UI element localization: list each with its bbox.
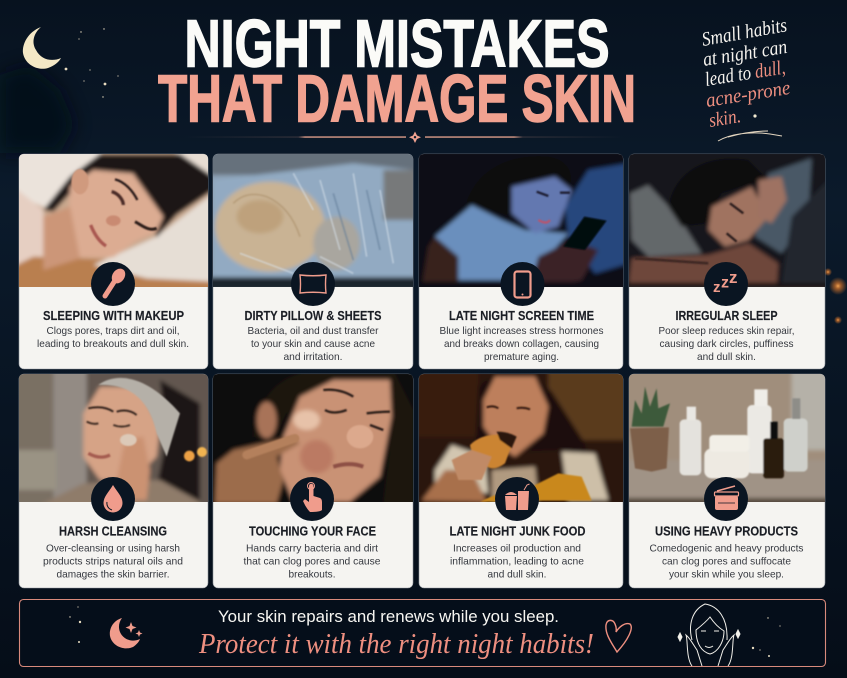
icon: crescent moon xyxy=(23,27,61,69)
panel: late night junk food xyxy=(415,370,628,588)
description: Increases oil production and xyxy=(453,542,581,554)
title xyxy=(158,6,636,136)
icon: zzz: z xyxy=(713,279,720,296)
description: and dull skin. xyxy=(697,351,756,363)
heading: USING HEAVY PRODUCTS xyxy=(655,524,798,538)
icon: smartphone xyxy=(500,262,544,306)
description: to your skin and cause acne xyxy=(251,338,375,350)
heading: SLEEPING WITH MAKEUP xyxy=(43,309,184,323)
icon: water drop xyxy=(91,477,135,521)
panel: sleeping with makeup xyxy=(13,150,213,369)
panel: touching your face xyxy=(207,370,420,588)
description xyxy=(244,542,381,580)
panel: irregular sleep xyxy=(625,150,832,369)
description xyxy=(37,325,189,350)
description: leading to breakouts and dull skin. xyxy=(37,338,189,350)
description xyxy=(650,542,804,580)
tagline: acne-prone xyxy=(704,77,792,112)
icon: zzz xyxy=(704,262,748,306)
tagline: at night can xyxy=(701,36,789,71)
photo: woman washing her face xyxy=(19,374,208,502)
icon: zzz: z xyxy=(721,274,729,292)
description xyxy=(658,325,794,363)
description: Bacteria, oil and dust transfer xyxy=(248,325,379,337)
heading: LATE NIGHT SCREEN TIME xyxy=(449,309,594,323)
icon: footer moon and stars xyxy=(110,618,142,648)
description: and dull skin. xyxy=(488,568,546,580)
photo: woman touching her cheek xyxy=(213,374,413,502)
banner line two: Protect it with the right night habits! xyxy=(198,628,594,660)
tagline: Small habits xyxy=(700,14,789,51)
panel: using heavy products xyxy=(625,370,832,588)
description xyxy=(43,542,183,580)
icon: heart xyxy=(606,620,631,652)
description: causing dark circles, puffiness xyxy=(660,338,794,350)
panel: late night screen time xyxy=(415,150,628,369)
description: that can clog pores and cause xyxy=(244,556,381,568)
description xyxy=(440,325,604,363)
description: Over-cleansing or using harsh xyxy=(46,542,180,554)
heading: HARSH CLEANSING xyxy=(59,524,167,538)
description: Poor sleep reduces skin repair, xyxy=(658,325,794,337)
description: your skin while you sleep. xyxy=(669,568,784,580)
tagline xyxy=(700,14,792,141)
description: premature aging. xyxy=(484,351,559,363)
photo: woman on phone in the dark xyxy=(419,154,623,287)
description: and breaks down collagen, causing xyxy=(444,338,599,350)
icon: junk food and drink xyxy=(495,477,539,521)
title: NIGHT MISTAKES xyxy=(184,6,610,82)
heading: IRREGULAR SLEEP xyxy=(676,309,778,323)
icon: pillow xyxy=(291,262,335,306)
description: damages the skin barrier. xyxy=(56,568,170,580)
heading: LATE NIGHT JUNK FOOD xyxy=(450,524,586,538)
description: Hands carry bacteria and dirt xyxy=(246,542,378,554)
description: Clogs pores, traps dirt and oil, xyxy=(46,325,180,337)
photo: stained pillow xyxy=(213,154,413,287)
title divider ornament xyxy=(184,132,624,143)
photo: restless woman in bed xyxy=(625,150,832,290)
heading: TOUCHING YOUR FACE xyxy=(249,524,376,538)
photo: woman asleep with makeup xyxy=(19,154,208,287)
photo: skincare bottles on a shelf xyxy=(629,374,825,502)
tagline: lead to dull, xyxy=(703,57,787,91)
icon: zzz: z xyxy=(729,268,738,287)
icon: makeup sponge xyxy=(91,262,135,306)
footer banner xyxy=(20,600,826,666)
panel: dirty pillow and sheets xyxy=(207,150,420,369)
title: THAT DAMAGE SKIN xyxy=(158,62,636,136)
description xyxy=(248,325,379,363)
description: and irritation. xyxy=(284,351,342,363)
description: Blue light increases stress hormones xyxy=(440,325,604,337)
panel: harsh cleansing xyxy=(13,370,213,588)
photo: woman eating a burger xyxy=(419,374,623,502)
tagline: skin. xyxy=(707,105,742,132)
description xyxy=(450,542,584,580)
description: inflammation, leading to acne xyxy=(450,556,584,568)
icon: woman with hands on face xyxy=(678,604,740,666)
description: can clog pores and suffocate xyxy=(662,556,791,568)
heading: DIRTY PILLOW & SHEETS xyxy=(244,309,382,323)
description: breakouts. xyxy=(288,568,336,580)
banner line one: Your skin repairs and renews while you sleep. xyxy=(218,607,559,626)
icon: cream jar xyxy=(704,477,748,521)
icon: pointing finger xyxy=(290,477,334,521)
description: Comedogenic and heavy products xyxy=(650,542,804,554)
description: products strips natural oils and xyxy=(43,556,183,568)
